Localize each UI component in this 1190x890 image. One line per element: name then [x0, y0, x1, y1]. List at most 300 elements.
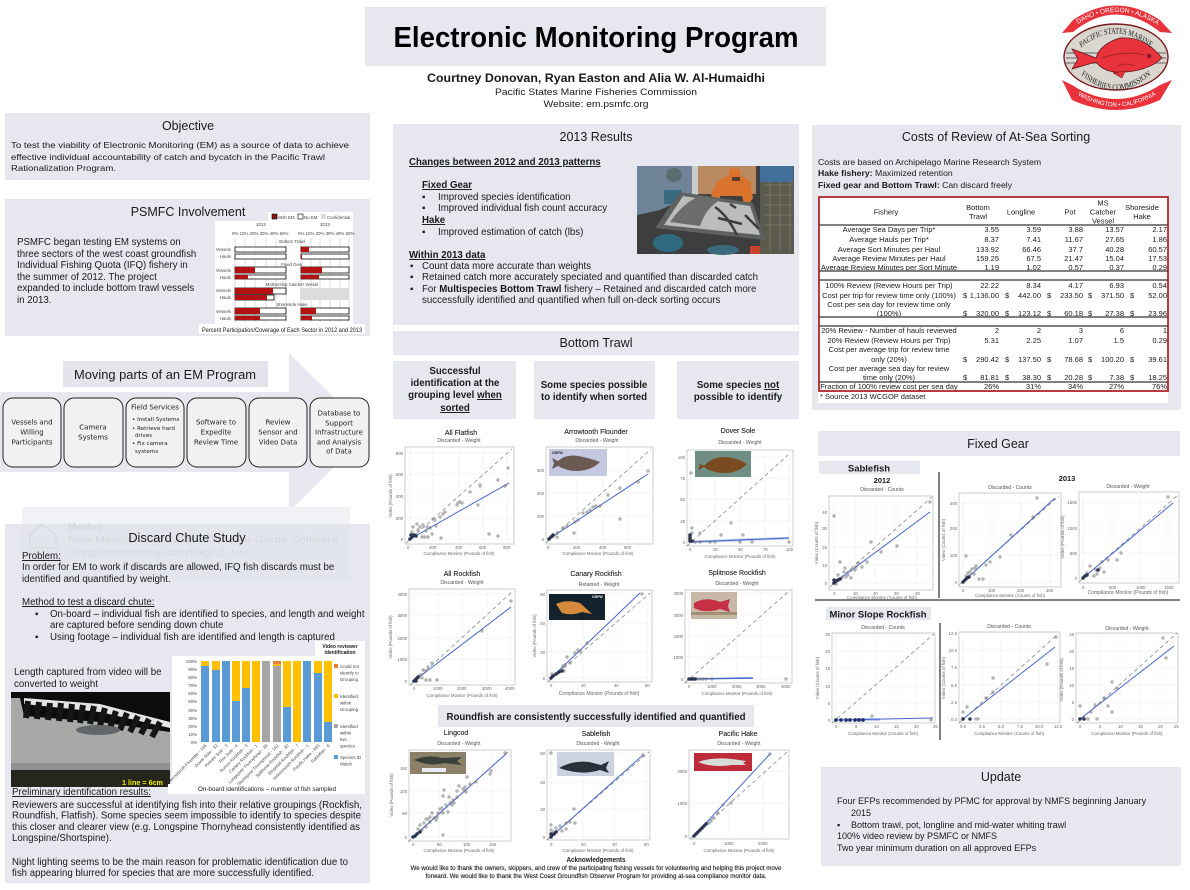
chart: sablefish 2013 counts: 100: [988, 588, 996, 593]
box: field services: systems: [135, 449, 158, 455]
text block: changes between years: [409, 157, 607, 238]
ghost notification watermark: <http://www.meetup.com/t/wg2.2_1/>: [72, 547, 245, 559]
chart: sablefish roundfish: 40: [612, 842, 617, 847]
chart: splitnose rockfish: 4000: [673, 591, 684, 596]
heading: roundfish: [438, 705, 754, 727]
chart: percent participation by sector: Hauls: [220, 254, 232, 259]
photo: fisherman sorting catch on deck: [637, 166, 794, 255]
chart: percent participation by sector: Vessels: [216, 309, 232, 314]
table: review costs by fishery: 78.68: [1064, 355, 1083, 364]
table: review costs by fishery: 13.57: [1105, 225, 1124, 234]
panel: bottom trawl heading: Bottom Trawl: [560, 336, 632, 350]
table: review costs by fishery: 17.53: [1148, 254, 1167, 263]
chart: all flatfish: 400: [455, 545, 463, 550]
chart: minor slope 2013 weight: Discarded - Weight: [1105, 626, 1149, 632]
table: review costs by fishery: only (20%): [871, 355, 907, 364]
callout: not possible: Some species not: [697, 380, 780, 391]
chart: splitnose rockfish: [673, 570, 792, 696]
chart: minor slope 2013 weight: 5: [1099, 724, 1102, 729]
table: review costs by fishery: 7.41: [1026, 235, 1041, 244]
table: review costs by fishery: $: [1047, 291, 1052, 300]
chart: lingcod: 100: [463, 842, 471, 847]
chart: video reviewer identification stacked bars: 20%: [188, 724, 197, 729]
chart: minor slope 2013 weight: 25: [1174, 724, 1179, 729]
chart legend: identify to: [340, 670, 359, 676]
table: review costs by fishery: 8.34: [1026, 281, 1041, 290]
photo: lingcod: [410, 752, 466, 774]
chart: minor slope 2013 weight: 0: [1079, 724, 1082, 729]
photo: pacific hake: [694, 753, 752, 771]
chart: minor slope 2012 counts: 5: [828, 701, 831, 706]
box: vessels and willing participants: Vessels and: [11, 418, 53, 426]
table: review costs by fishery: 0.54: [1152, 281, 1167, 290]
table: review costs by fishery: 52.00: [1148, 291, 1167, 300]
chart: arrowtooth flounder: 600: [537, 468, 545, 473]
panel: bottom trawl heading: [393, 331, 799, 355]
panel: update: [821, 767, 1181, 866]
text block: update details: Bottom trawl, pot, longline and mid-water whiting trawl: [851, 820, 1066, 830]
box: field services: Field Services: [131, 404, 179, 412]
table: review costs by fishery: Trawl: [969, 212, 987, 221]
chart: sablefish 2012 counts: 10: [822, 563, 828, 568]
table: review costs by fishery: 1: [1163, 326, 1167, 335]
text block: acknowledgements: We would like to thank the owners, skippers, and crew of the participating fishing vessels for volunteering and helping this project move: [410, 865, 782, 872]
table: review costs by fishery: 21.47: [1064, 254, 1083, 263]
chart: all flatfish: 0: [407, 545, 410, 550]
table: review costs by fishery: 20% Review - Number of hauls reviewed: [821, 326, 957, 335]
chart: percent participation by sector: Shoreside Hake: [276, 302, 308, 307]
box: database: Database to: [318, 410, 360, 418]
chart: all flatfish: 200: [429, 545, 437, 550]
table: review costs by fishery: $: [1005, 373, 1010, 382]
table: review costs by fishery: Pot: [1064, 208, 1077, 216]
text block: involvement description: Individual Fishing Quota (IFQ) fishery in: [17, 260, 188, 271]
table: review costs by fishery: Cost per average sea day for review: [829, 364, 950, 373]
table: review costs by fishery: Cost per average trip for review time: [829, 345, 949, 354]
text block: preliminary identification results: Longspine/Shortspine).: [12, 833, 112, 844]
chart: all rockfish: 4000: [397, 592, 408, 597]
chart: percent participation by sector: [199, 212, 365, 334]
chart: pacific hake: 2000: [677, 769, 688, 774]
heading: sablefish: [819, 461, 920, 474]
chart: dover sole: 100: [678, 455, 686, 460]
chart: all flatfish: 600: [396, 472, 404, 477]
chart: sablefish roundfish: 20: [540, 807, 546, 812]
panel: objective: effective individual accountability of catch and bycatch in the Pacific Trawl: [11, 152, 325, 162]
chart: video reviewer identification stacked bars: Longspine Thornyhead - 38: [227, 743, 269, 785]
chart: percent participation by sector: Vessels: [216, 268, 232, 273]
chart: minor slope 2013 counts: Video (Counts of fish): [941, 656, 946, 699]
chart: sablefish 2013 counts: 300: [1046, 588, 1054, 593]
table: review costs by fishery: $: [1005, 309, 1010, 318]
chart: lingcod: Video (Pounds of fish): [389, 773, 394, 817]
table: review costs by fishery: 81.81: [980, 373, 999, 382]
authors and affiliation: [427, 71, 765, 110]
text block: changes between years: Improved estimation of catch (lbs): [438, 227, 583, 238]
panel: PSMFC involvement: [5, 199, 370, 336]
chart: minor slope 2013 weight: 20: [1069, 649, 1075, 654]
chart: all flatfish: 400: [396, 494, 404, 499]
table: review costs by fishery: 60.18: [1064, 309, 1083, 318]
table: review costs by fishery: * Source 2013 WCGOP dataset: [820, 392, 926, 401]
table: review costs by fishery: 1.5: [1114, 336, 1124, 345]
box: review sensor and video data: Review: [266, 418, 291, 426]
chart: percent participation by sector: Vessels: [216, 247, 232, 252]
text block: involvement description: three sectors of the west coast groundfish: [17, 249, 196, 260]
chart: canary rockfish: 40: [614, 683, 619, 688]
chart legend: Grouping: [340, 677, 359, 682]
chart: lingcod: 150: [489, 842, 497, 847]
chart: video reviewer identification stacked bars: Stripetail Rockfish - 7: [267, 743, 300, 776]
box: database: Support: [325, 420, 353, 428]
table: review costs by fishery: Bottom: [966, 203, 990, 212]
chart: minor slope 2012 counts: 0: [835, 724, 838, 729]
chart: minor slope 2013 counts: Compliance Monitor (Counts of fish): [974, 731, 1045, 736]
chart: minor slope 2012 counts: 25: [825, 632, 831, 637]
text block: changes between years: Improved individual fish count accuracy: [438, 203, 607, 214]
chart: video reviewer identification stacked bars: 100%: [186, 659, 197, 664]
table: review costs by fishery: 18.25: [1148, 373, 1167, 382]
callout: successful identification: sorted: [440, 403, 470, 414]
chart legend: within: [340, 730, 352, 736]
text block: involvement description: in 2013.: [17, 295, 51, 306]
chart: canary rockfish: 60: [645, 683, 650, 688]
table: review costs by fishery: 6.93: [1109, 281, 1124, 290]
chart: splitnose rockfish: Compliance Monitor (Pounds of fish): [701, 691, 773, 696]
photo: dover sole: [695, 451, 751, 477]
table: review costs by fishery: 15.04: [1105, 254, 1124, 263]
chart: minor slope 2012 counts: 5: [855, 724, 858, 729]
box: vessels and willing participants: Willing: [20, 428, 44, 436]
chart: all rockfish: 1000: [433, 686, 443, 691]
box: review sensor and video data: Sensor and: [258, 428, 298, 436]
chart: minor slope 2013 weight: Compliance Monitor (Pounds of fish): [1091, 731, 1163, 736]
text block: within 2013 data: ▪: [410, 284, 413, 295]
panel: fixed gear heading: Fixed Gear: [967, 437, 1029, 451]
table: review costs by fishery: Shoreside: [1125, 203, 1159, 212]
box: review sensor and video data: Video Data: [259, 438, 297, 446]
text block: update details: 2015: [851, 808, 871, 818]
text block: problem and method: ▪: [35, 609, 38, 620]
table: review costs by fishery: $: [1005, 355, 1010, 364]
chart legend: Match: [340, 762, 353, 766]
chart: minor slope 2012 counts: Compliance Monitor (Counts of fish): [848, 731, 919, 736]
heading: sablefish: Sablefish: [848, 464, 890, 474]
table: review costs by fishery: Cost per sea day for review time only: [827, 300, 951, 309]
panel: costs of review of at-sea sorting: [812, 125, 1181, 410]
table: review costs by fishery: $: [1047, 355, 1052, 364]
table: review costs by fishery: $: [1088, 373, 1093, 382]
table: review costs by fishery: MS: [1097, 198, 1109, 208]
chart: lingcod: Lingcod: [444, 730, 468, 737]
table: review costs by fishery: 0.29: [1152, 263, 1167, 272]
chart: sablefish 2013 counts: 0: [955, 580, 958, 585]
chart: sablefish 2012 counts: Compliance Monitor (Counts of fish): [847, 595, 918, 600]
box: software to expedite review time: Software to: [196, 418, 236, 426]
chart: canary rockfish: 0: [543, 676, 546, 681]
chart: sablefish 2013 weight: 0: [1075, 576, 1078, 581]
chart: lingcod: 50: [402, 811, 408, 816]
chart: video reviewer identification stacked bars: 10%: [188, 732, 197, 737]
chart: sablefish 2012 counts: [814, 487, 933, 600]
table: review costs by fishery: Catcher: [1090, 208, 1117, 216]
box: field services: drives: [135, 433, 152, 439]
text block: involvement description: expanded to include bottom trawl vessels: [17, 283, 194, 294]
chart: sablefish 2012 counts: 30: [822, 526, 828, 531]
chart: splitnose rockfish: Discarded - Weight: [715, 581, 759, 587]
chart: dover sole: [678, 428, 794, 559]
chart: all flatfish: 800: [503, 545, 511, 550]
chart: percent participation by sector: Fixed Gear: [281, 262, 303, 267]
table: review costs by fishery: $: [963, 291, 968, 300]
table: review costs by fishery: 34%: [1068, 382, 1083, 391]
title banner: [365, 7, 826, 66]
table: review costs by fishery: 66.46: [1022, 245, 1041, 254]
chart: pacific hake: 0: [693, 841, 696, 846]
chart legend: Grouping: [340, 707, 359, 712]
text block: changes between years: ▪: [422, 192, 425, 203]
text block: problem and method: Using footage – individual fish are identified and length is captured: [50, 632, 335, 643]
chart: minor slope 2013 weight: 15: [1069, 666, 1075, 671]
chart: minor slope 2012 counts: 15: [894, 724, 899, 729]
panel: objective: Rationalization Program.: [11, 163, 116, 173]
text: 2012: [874, 476, 890, 485]
chart: dover sole: 25: [680, 519, 686, 524]
table: review costs by fishery: $: [1088, 355, 1093, 364]
panel: objective: Objective: [162, 119, 214, 133]
table: review costs by fishery: $: [1130, 291, 1135, 300]
table: review costs by fishery: $: [963, 373, 968, 382]
text block: changes between years: Fixed Gear: [422, 180, 472, 191]
text block: involvement description: PSMFC began testing EM systems on: [17, 237, 181, 248]
chart: lingcod: Discarded - Weight: [437, 741, 481, 747]
chart: minor slope 2013 weight: 20: [1158, 724, 1163, 729]
chart: minor slope 2013 counts: 0.0: [960, 724, 967, 729]
chart: percent participation by sector: 0% 10% 20% 30% 40% 50%: [232, 231, 288, 236]
chart: minor slope 2013 weight: [1059, 626, 1179, 736]
chart: arrowtooth flounder: 400: [537, 491, 545, 496]
chart: arrowtooth flounder: 0: [542, 537, 545, 542]
chart: minor slope 2013 counts: 0.0: [951, 717, 958, 722]
table: review costs by fishery: 27%: [1109, 382, 1124, 391]
chart: minor slope 2013 weight: 0: [1072, 717, 1075, 722]
text block: preliminary identification results: fish appearing blurred for species that are more successfully identified.: [12, 868, 314, 879]
chart: minor slope 2013 counts: Discarded - Counts: [987, 624, 1031, 630]
chart: all rockfish: Discarded - Weight: [440, 580, 484, 586]
panel: 2013 results: 2013 Results: [560, 130, 632, 144]
text block: acknowledgements: Acknowledgements: [566, 855, 626, 864]
chart: video reviewer identification stacked bars: Canary Rockfish - 1: [228, 743, 259, 774]
box: vessels and willing participants: Participants: [11, 438, 53, 446]
chart: minor slope 2012 counts: 25: [933, 724, 938, 729]
table: review costs by fishery: $: [1088, 291, 1093, 300]
chart: dover sole: 0: [689, 547, 692, 552]
icon: PSMFC logo: [1062, 6, 1172, 110]
chart: video reviewer identification stacked bars: Dover Sole - 33: [194, 743, 219, 768]
chart: all rockfish: 0: [413, 686, 416, 691]
chart: dover sole: 50: [738, 547, 743, 552]
table: review costs by fishery: 2: [1037, 326, 1041, 335]
chart: dover sole: 75: [763, 547, 768, 552]
photo: discard chute with measuring stripes: 1 line = 6cm: [122, 778, 163, 787]
chart: dover sole: 50: [680, 497, 686, 502]
box: database: [310, 398, 369, 467]
chart: all rockfish: Video (Pounds of fish): [388, 615, 393, 659]
chart: minor slope 2013 counts: 2.5: [979, 724, 986, 729]
table: review costs by fishery: 27.38: [1105, 309, 1124, 318]
chart: dover sole: 25: [713, 547, 718, 552]
chart: arrowtooth flounder: 0: [547, 545, 550, 550]
text block: involvement description: [17, 237, 196, 306]
chart: all rockfish: 3000: [482, 686, 492, 691]
chart: canary rockfish: Retained - Weight: [579, 582, 620, 588]
panel: fixed gear heading: [818, 431, 1180, 456]
box: software to expedite review time: [187, 398, 246, 467]
chart: sablefish roundfish: 60: [540, 751, 546, 756]
chart: sablefish 2013 counts: 200: [1017, 588, 1025, 593]
chart: arrowtooth flounder: 200: [573, 545, 581, 550]
chart: pacific hake: 0: [685, 834, 688, 839]
authors and affiliation: Pacific States Marine Fisheries Commission: [495, 87, 697, 98]
chart: sablefish 2013 counts: 100: [950, 553, 958, 558]
text block: problem and method: ▪: [35, 632, 38, 643]
chart: video reviewer identification stacked bars: Rex Sole - 4: [218, 743, 239, 764]
callout: possible when sorted: to identify when sorted: [541, 392, 647, 403]
table: review costs by fishery: $: [963, 355, 968, 364]
chart: pacific hake: Compliance Monitor (Pounds of fish): [703, 848, 775, 853]
chart: minor slope 2013 counts: 7.5: [1017, 724, 1024, 729]
text block: involvement description: the summer of 2012. The project: [17, 272, 157, 283]
chart: sablefish 2012 counts: 40: [822, 510, 828, 515]
text block: changes between years: ▪: [422, 227, 425, 238]
chart: video reviewer identification stacked bars: 0%: [191, 740, 197, 745]
text block: problem and method: identified and quantified by weight.: [22, 574, 171, 585]
chart: lingcod: 100: [400, 789, 408, 794]
chart legend: Species ID: [340, 755, 361, 760]
chart: lingcod: [389, 730, 511, 853]
photo: splitnose rockfish: [691, 592, 737, 619]
chart: video reviewer identification stacked bars: 30%: [188, 716, 197, 721]
chart: sablefish roundfish: Discarded - Weight: [576, 741, 620, 747]
panel: 2013 results: [393, 124, 799, 325]
text block: problem and method: [22, 551, 365, 643]
chart: pacific hake: 2000: [758, 841, 768, 846]
chart: lingcod: Compliance Monitor (Pounds of fish): [423, 848, 495, 853]
chart: minor slope 2012 counts: [815, 625, 938, 736]
text block: update details: Four EFPs recommended by PFMC for approval by NMFS beginning January: [837, 796, 1147, 806]
chart legend: Could not: [340, 664, 360, 669]
ghost notification watermark: [22, 507, 350, 580]
table: review costs by fishery: 100.20: [1101, 355, 1124, 364]
table: review costs by fishery: Average Sort Minutes per Haul: [838, 245, 941, 254]
callout: successful identification: Successful: [429, 366, 481, 377]
table: review costs by fishery: 100% Review (Review Hours per Trip): [825, 281, 953, 290]
table: review costs by fishery: 442.00: [1018, 291, 1041, 300]
icon: PSMFC logo: FISHERIES COMMISSION: [1082, 70, 1150, 90]
table: review costs by fishery: $: [1005, 291, 1010, 300]
callout: possible when sorted: [534, 361, 655, 419]
chart: minor slope 2013 counts: 7.5: [951, 665, 958, 670]
box: field services: • Install Systems: [132, 417, 180, 423]
chart: dover sole: Compliance Monitor (Pounds of fish): [704, 554, 776, 559]
table: review costs by fishery: 5.31: [984, 336, 999, 345]
chart: sablefish roundfish: 0: [550, 842, 553, 847]
table: review costs by fishery: Longline: [1007, 208, 1035, 216]
chart: all rockfish: 4000: [505, 686, 515, 691]
chart: splitnose rockfish: 0: [681, 677, 684, 682]
panel: costs of review of at-sea sorting: Costs of Review of At-Sea Sorting: [902, 130, 1090, 144]
arrow: moving parts background: [0, 353, 369, 512]
chart: minor slope 2013 counts: 2.5: [951, 700, 958, 705]
chart: all flatfish: Video (Pounds of fish): [388, 474, 393, 518]
chart: splitnose rockfish: 3000: [756, 684, 766, 689]
chart: pacific hake: [677, 731, 789, 853]
chart: splitnose rockfish: 0: [688, 684, 691, 689]
callout: successful identification: grouping level when: [408, 390, 502, 401]
chart: minor slope 2013 weight: 15: [1138, 724, 1143, 729]
table: review costs by fishery: 1.19: [984, 263, 999, 272]
table: review costs by fishery: 290.42: [976, 355, 999, 364]
chart: video reviewer identification stacked bars: Splitnose Rockfish - 30: [254, 743, 290, 778]
chart: canary rockfish: Canary Rockfish: [570, 571, 622, 578]
chart: arrowtooth flounder: 200: [537, 514, 545, 519]
table: review costs by fishery: 6: [1120, 326, 1124, 335]
table: review costs by fishery: 2.25: [1026, 336, 1041, 345]
heading: moving parts of an EM program: [63, 361, 268, 387]
chart: all flatfish: [388, 430, 514, 556]
chart: minor slope 2012 counts: 20: [825, 649, 831, 654]
chart: minor slope 2013 counts: 5.0: [998, 724, 1005, 729]
table: review costs by fishery: 1,136.00: [970, 291, 999, 300]
heading: minor slope rockfish: Minor Slope Rockfish: [829, 610, 927, 620]
chart: lingcod: 0: [405, 835, 408, 840]
panel: discard chute study: Length captured from video will be: [14, 667, 162, 678]
table: review costs by fishery: 137.50: [1018, 355, 1041, 364]
chart: percent participation by sector: Hauls: [220, 295, 232, 300]
photo: canary rockfish: ODFW: [592, 595, 603, 599]
table: review costs by fishery: 38.30: [1022, 373, 1041, 382]
box: software to expedite review time: Expedite: [201, 428, 231, 436]
callout: not possible: possible to identify: [694, 392, 783, 403]
chart: sablefish roundfish: 0: [543, 835, 546, 840]
chart: sablefish 2013 weight: Compliance Monitor (Pounds of fish): [1088, 590, 1169, 596]
chart: dover sole: Discarded - Weight: [718, 440, 762, 446]
chart: splitnose rockfish: 2000: [732, 684, 742, 689]
chart: all rockfish: [388, 571, 515, 698]
table: review costs by fishery: 60.57: [1148, 245, 1167, 254]
chart: sablefish 2012 counts: 0: [825, 581, 828, 586]
chart: lingcod: 150: [400, 766, 408, 771]
chart: all flatfish: 200: [396, 516, 404, 521]
chart: all flatfish: 600: [479, 545, 487, 550]
chart: sablefish 2012 counts: Discarded - Counts: [860, 487, 904, 493]
box: database: Infrastructure: [315, 428, 363, 436]
chart: video reviewer identification stacked bars: On-board identifications – number of fish sampled: [198, 787, 336, 793]
table: review costs by fishery: 0.57: [1068, 263, 1083, 272]
chart: percent participation by sector: Bottom Trawl: [279, 239, 305, 244]
table: review costs by fishery: Hake: [1133, 212, 1151, 221]
box: software to expedite review time: Review Time: [194, 438, 238, 446]
text block: cost assumptions: Hake fishery: Maximized retention: [818, 168, 953, 178]
text block: within 2013 data: ▪: [410, 272, 413, 283]
table: review costs by fishery: $: [1047, 373, 1052, 382]
text block: problem and method: Problem:: [22, 551, 61, 562]
table: review costs by fishery: 233.50: [1060, 291, 1083, 300]
table: review costs by fishery: $: [1047, 309, 1052, 318]
box: database: and Analysis: [317, 438, 361, 446]
chart: sablefish 2013 counts: Discarded - Counts: [988, 485, 1032, 491]
chart: video reviewer identification stacked bars: Petrale Sole - 3: [204, 743, 229, 768]
